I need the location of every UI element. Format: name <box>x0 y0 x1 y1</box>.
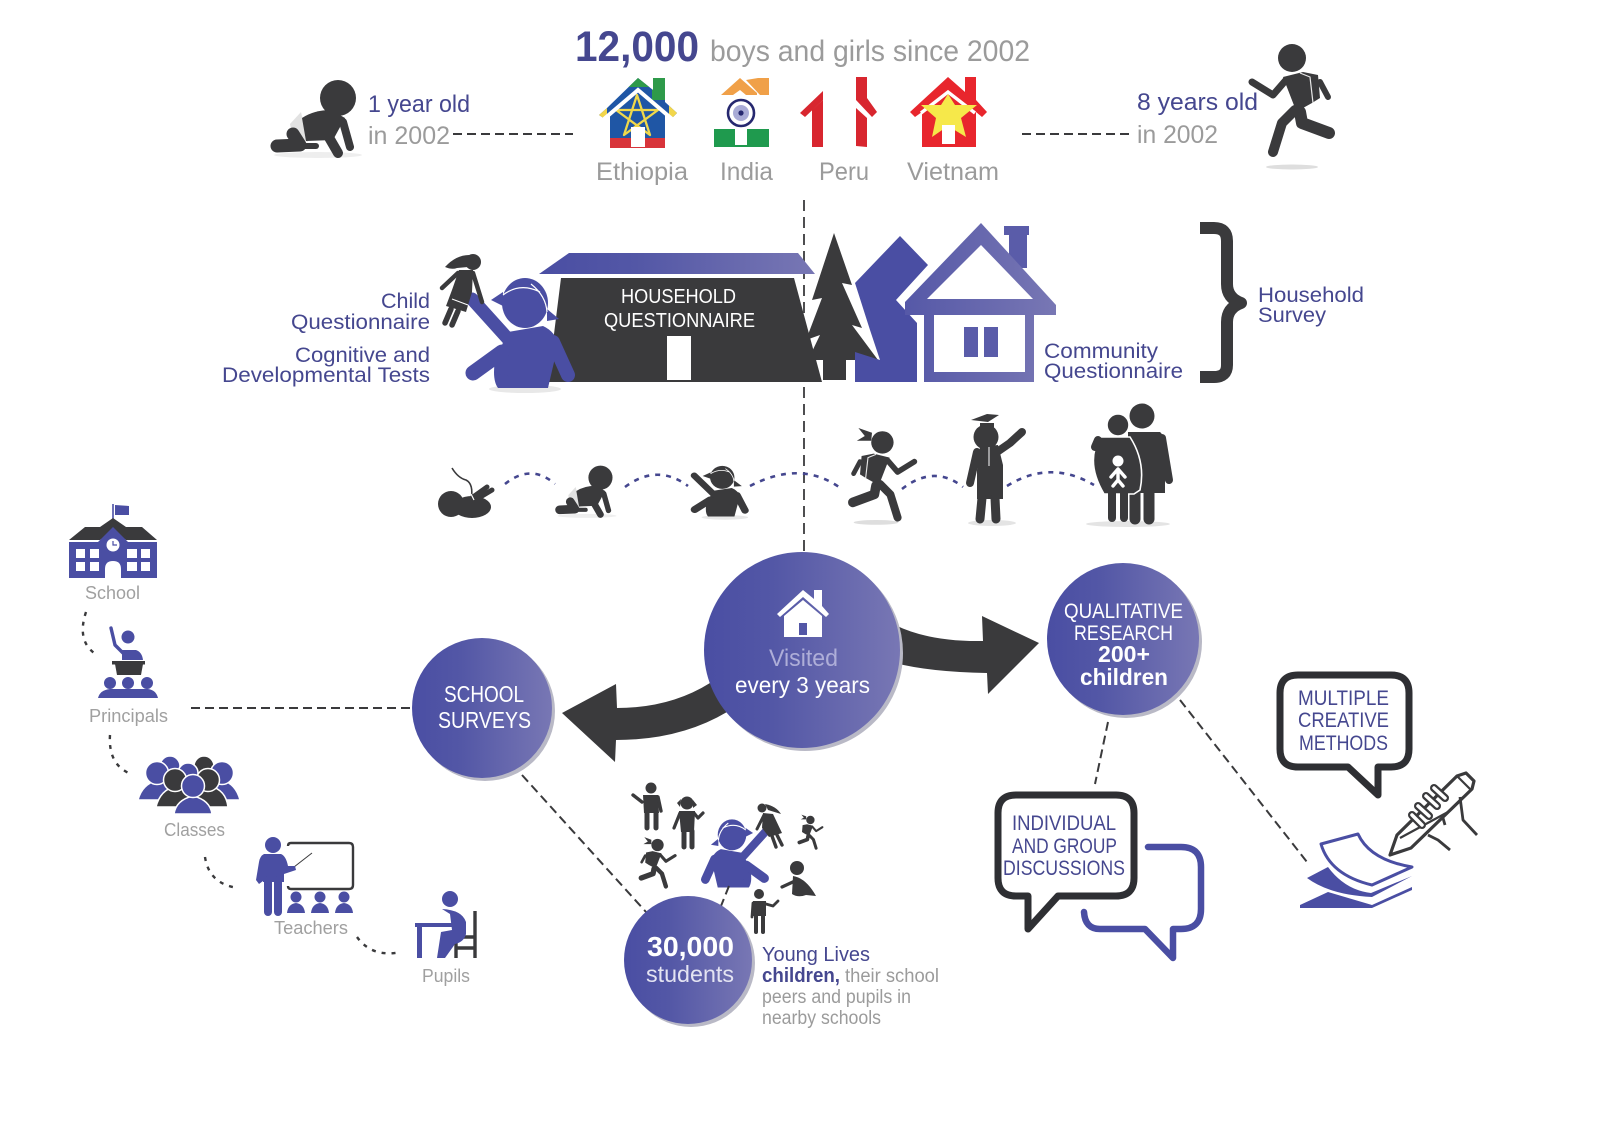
icon: child holding doll <box>442 254 568 393</box>
icon: life stage baby <box>558 466 617 518</box>
title: 12,000 boys and girls since 2002: 12,000 <box>575 23 699 71</box>
connector: principals to school surveys <box>191 707 412 709</box>
arrow: main to school surveys <box>562 683 727 762</box>
text: 8 years old in 2002 <box>1137 89 1258 149</box>
panel: visited every 3 years: every 3 years <box>735 672 870 698</box>
text: country labels: India <box>720 158 773 186</box>
icon: hand writing with pen <box>1390 773 1477 855</box>
label: Principals: Principals <box>89 706 168 726</box>
icon: life stage sitting child <box>694 466 748 520</box>
callout: multiple creative methods: MULTIPLE <box>1298 687 1389 710</box>
callout: individual and group discussions: INDIVIDUAL <box>1012 812 1116 835</box>
icon: curly brace <box>1200 228 1241 377</box>
text: HOUSEHOLD QUESTIONNAIRE: QUESTIONNAIRE <box>604 310 755 332</box>
text: Young Lives children description <box>762 944 939 1029</box>
text: 1 year old in 2002: 1 year old <box>368 91 470 118</box>
text: Young Lives children description: Young Lives <box>762 944 870 966</box>
panel: qualitative research: 200+ <box>1098 641 1150 667</box>
icon: standing girl <box>674 796 703 847</box>
icon: white home <box>777 590 829 637</box>
connector: classes to teachers <box>205 857 238 888</box>
label: Classes: Classes <box>164 820 225 840</box>
text: HOUSEHOLD QUESTIONNAIRE: HOUSEHOLD <box>621 286 736 308</box>
panel: qualitative research: children <box>1080 664 1168 690</box>
connector: research to discussions <box>1095 722 1108 784</box>
icon: girl with ponytail <box>757 804 782 847</box>
panel: 30,000 students: 30,000 <box>647 931 734 962</box>
connector: school to principals <box>83 612 97 655</box>
icon: running girl <box>641 837 675 886</box>
icon: household building <box>539 253 822 382</box>
panel: school surveys: SURVEYS <box>438 707 531 733</box>
text: 1 year old in 2002: in 2002 <box>368 122 450 150</box>
icon: doll <box>442 254 482 325</box>
panel: qualitative research <box>1047 563 1202 718</box>
icon: stack of paper <box>1300 834 1412 908</box>
arrow: main to qualitative research <box>895 616 1039 694</box>
callout: multiple creative methods: CREATIVE <box>1298 709 1389 732</box>
icon: principal at podium <box>98 628 158 698</box>
icon: foetus <box>438 468 492 518</box>
text: Child Questionnaire, Cognitive and Developmental Tests <box>222 290 430 387</box>
text: Child Questionnaire, Cognitive and Developmental Tests: Questionnaire <box>291 311 430 334</box>
group: children icons <box>633 782 822 932</box>
label: Pupils: Pupils <box>422 966 470 986</box>
text: Household Survey: Survey <box>1258 304 1327 327</box>
connector: vertical dashed line <box>803 200 805 554</box>
icon: India flag house <box>714 78 769 147</box>
text: country labels: Ethiopia <box>596 158 688 186</box>
panel: school surveys: SCHOOL <box>444 681 524 707</box>
text: Child Questionnaire, Cognitive and Developmental Tests: Developmental Tests <box>222 364 430 387</box>
text: Community Questionnaire: Community <box>1044 340 1159 363</box>
life stage connector arcs <box>505 472 1094 489</box>
text: 8 years old in 2002: 8 years old <box>1137 89 1258 116</box>
text: Young Lives children description: their school <box>845 966 939 987</box>
text: Household Survey: Household <box>1258 284 1364 307</box>
connector: left dashed line <box>453 133 573 135</box>
text: Household Survey <box>1258 284 1364 327</box>
text: Young Lives children description: peers and pupils in <box>762 987 911 1008</box>
title: 12,000 boys and girls since 2002: boys and girls since 2002 <box>710 35 1030 68</box>
connector: teachers to pupils <box>357 937 401 953</box>
icon: family with baby <box>1086 404 1170 527</box>
icon: Vietnam flag house <box>910 77 987 147</box>
icon: central blue child <box>705 819 765 888</box>
callout: individual and group discussions <box>998 795 1134 929</box>
icon: blue reply bubble <box>1084 847 1201 958</box>
callout: individual and group discussions: AND GROUP <box>1012 835 1117 858</box>
connector: right dashed line <box>1022 133 1130 135</box>
text: 8 years old in 2002: in 2002 <box>1137 121 1218 149</box>
text: Community Questionnaire <box>1044 340 1183 383</box>
connector: principals to classes <box>110 735 131 774</box>
icon: standing boy <box>633 782 661 828</box>
panel: school surveys <box>412 638 555 781</box>
text: Young Lives children description: children, <box>762 965 840 987</box>
text: HOUSEHOLD QUESTIONNAIRE <box>604 286 755 332</box>
callout: multiple creative methods: METHODS <box>1299 732 1388 755</box>
panel: visited every 3 years <box>704 552 903 751</box>
icon: back community house <box>855 236 928 382</box>
text: country labels: Peru <box>819 158 869 186</box>
text: Young Lives children description: nearby schools <box>762 1008 881 1029</box>
panel: qualitative research: QUALITATIVE <box>1064 600 1183 623</box>
icon: crawling baby <box>274 80 362 158</box>
icon: pupil at desk <box>415 891 475 958</box>
icon: running child with backpack <box>1252 44 1329 170</box>
connector: child to students <box>721 886 729 906</box>
icon: graduate <box>968 414 1022 526</box>
icon: front community house <box>905 223 1056 382</box>
icon: small running child <box>799 815 822 848</box>
callout: individual and group discussions: DISCUSSIONS <box>1003 857 1125 880</box>
icon: Ethiopia flag house <box>599 78 677 148</box>
title: 12,000 boys and girls since 2002 <box>575 23 1030 71</box>
icon: life stage running teen <box>853 428 914 525</box>
icon: classes crowd <box>138 756 240 814</box>
icon: teacher at board <box>256 837 353 913</box>
label: Teachers: Teachers <box>274 918 348 938</box>
icon: small boy <box>752 889 778 932</box>
panel: visited every 3 years: Visited <box>769 645 838 672</box>
text: Child Questionnaire, Cognitive and Developmental Tests: Child <box>381 290 430 313</box>
icon: pine tree <box>806 233 878 380</box>
icon: sitting toddler <box>782 861 816 896</box>
text: Child Questionnaire, Cognitive and Developmental Tests: Cognitive and <box>295 344 430 367</box>
connector: school surveys to students <box>522 775 646 912</box>
icon: Peru flag house <box>800 77 877 147</box>
text: 1 year old in 2002 <box>368 91 470 150</box>
connector: research to creative methods <box>1180 700 1307 862</box>
panel: qualitative research: RESEARCH <box>1074 622 1173 645</box>
text: Community Questionnaire: Questionnaire <box>1044 360 1183 383</box>
callout: multiple creative methods <box>1280 675 1409 795</box>
panel: 30,000 students: students <box>646 961 734 987</box>
label: School: School <box>85 583 140 603</box>
text: country labels <box>596 158 999 186</box>
icon: school building <box>69 504 157 578</box>
panel: 30,000 students <box>624 896 755 1027</box>
text: country labels: Vietnam <box>907 158 999 186</box>
